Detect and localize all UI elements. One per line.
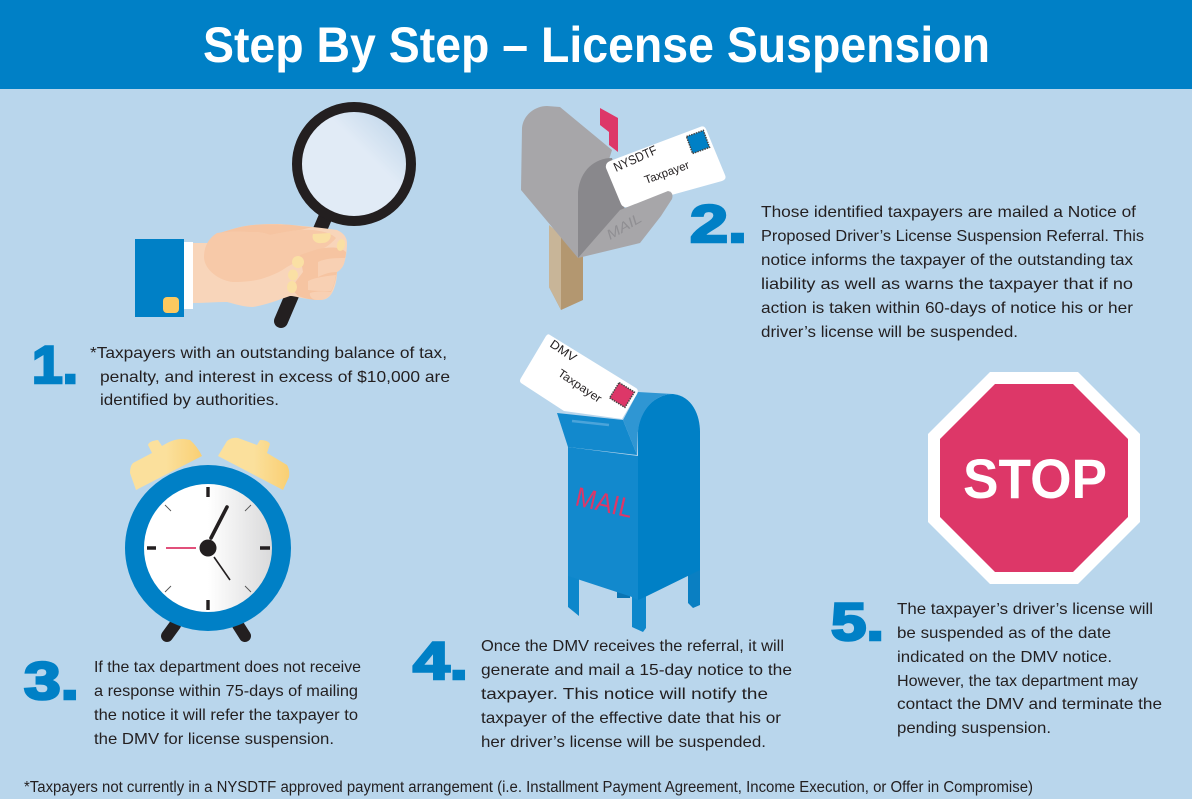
letter: Taxpayer (643, 159, 691, 187)
step 1 number: 1. (32, 336, 78, 395)
icon: stop sign (928, 372, 1140, 584)
title banner: Step By Step – License Suspension (203, 17, 990, 73)
step 2 text: Those identified taxpayers are mailed a Notice of (761, 204, 1137, 221)
letter: NYSDTF (611, 142, 659, 175)
icon: gray mailbox with letter (521, 106, 726, 310)
icon: gray mailbox with letter: MAIL (604, 210, 644, 243)
step 3 text: the DMV for license suspension. (94, 731, 334, 748)
step 2 text (761, 204, 1144, 341)
icon: hand holding magnifying glass (135, 107, 411, 321)
icon: stop sign: STOP (963, 447, 1107, 510)
step 1 text: *Taxpayers with an outstanding balance of tax, (90, 345, 447, 362)
step 5 text: pending suspension. (897, 720, 1051, 737)
step 5 text: The taxpayer’s driver’s license will (897, 601, 1153, 618)
letter (520, 334, 638, 419)
step 4 text: taxpayer of the effective date that his or (481, 710, 782, 727)
icon: blue mailbox with letter (520, 334, 700, 632)
step 5 number: 5. (831, 593, 884, 652)
step 2 text: Proposed Driver’s License Suspension Referral. This (761, 228, 1144, 245)
step 3 text: a response within 75-days of mailing (94, 683, 358, 700)
step 4 number: 4. (413, 632, 468, 691)
letter: DMV (547, 337, 579, 365)
step 4 text: taxpayer. This notice will notify the (481, 686, 768, 703)
step 5 text: However, the tax department may (897, 673, 1138, 690)
step 2 text: action is taken within 60-days of notice his or her (761, 300, 1134, 317)
step 3 text: If the tax department does not receive (94, 659, 361, 676)
step 5 text (897, 601, 1162, 737)
step 5 text: be suspended as of the date (897, 625, 1111, 642)
step 4 text (481, 638, 792, 751)
footnote: *Taxpayers not currently in a NYSDTF approved payment arrangement (i.e. Installment Payment Agreement, Income Execution, or Offer in Compromise) (24, 779, 1033, 796)
step 3 text: the notice it will refer the taxpayer to (94, 707, 358, 724)
letter: Taxpayer (555, 368, 604, 406)
icon: alarm clock (130, 438, 289, 636)
icon: blue mailbox with letter: MAIL (573, 482, 636, 524)
step 4 text: generate and mail a 15-day notice to the (481, 662, 792, 679)
step 3 text (94, 659, 361, 748)
step 2 number: 2. (690, 195, 747, 254)
step 1 text: identified by authorities. (100, 392, 279, 409)
title banner (0, 0, 1192, 89)
step 5 text: contact the DMV and terminate the (897, 696, 1162, 713)
step 2 text: driver’s license will be suspended. (761, 324, 1018, 341)
step 1 text: penalty, and interest in excess of $10,000 are (100, 369, 450, 386)
step 4 text: Once the DMV receives the referral, it will (481, 638, 784, 655)
letter (606, 126, 726, 207)
step 4 text: her driver’s license will be suspended. (481, 734, 766, 751)
step 2 text: liability as well as warns the taxpayer that if no (761, 276, 1133, 293)
step 2 text: notice informs the taxpayer of the outstanding tax (761, 252, 1133, 269)
step 3 number: 3. (24, 652, 79, 711)
step 5 text: indicated on the DMV notice. (897, 649, 1112, 666)
step 1 text (90, 345, 450, 409)
